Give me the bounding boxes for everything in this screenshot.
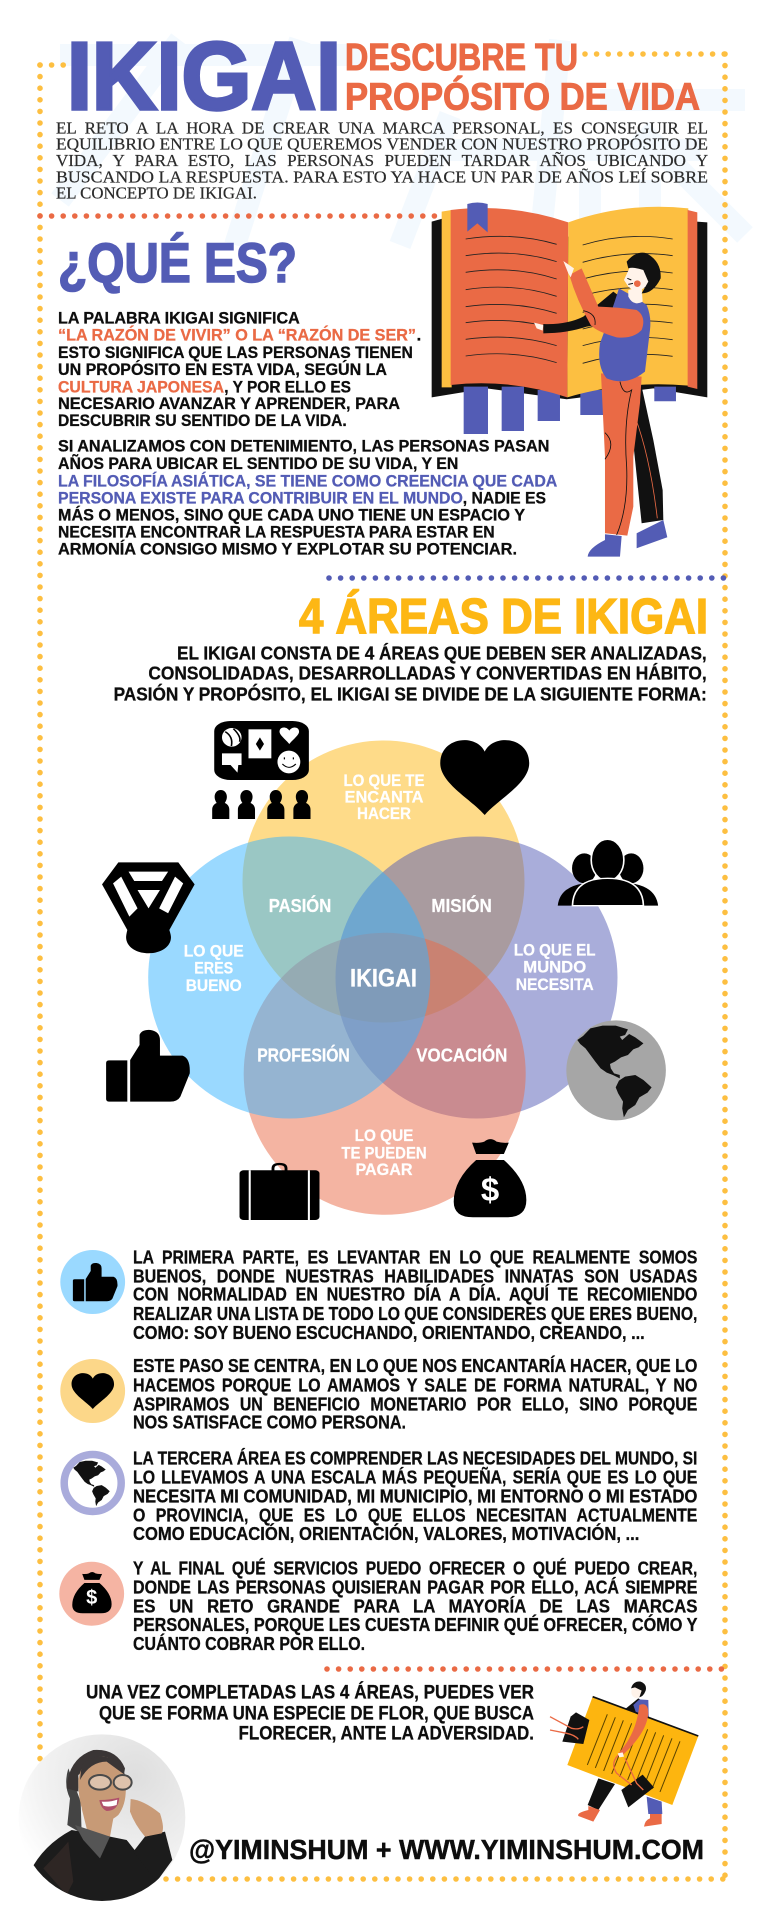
venn labels [184, 771, 596, 1179]
subtitle: descubre tu propósito de vida: DESCUBRE TU [345, 37, 578, 79]
background watermark [60, 40, 745, 245]
intro paragraph: EL CONCEPTO DE IKIGAI. [56, 184, 257, 203]
paragraph: areas intro: EL IKIGAI CONSTA DE 4 ÁREAS QUE DEBEN SER ANALIZADAS, [177, 642, 707, 663]
venn labels: LO QUE TE [344, 771, 424, 790]
paragraph: meaning of ikigai: . [416, 326, 421, 345]
list item 4: money: ES UN RETO GRANDE PARA LA MAYORÍA DE LAS MARCAS [133, 1596, 697, 1617]
paragraph: meaning of ikigai: NECESARIO AVANZAR Y APRENDER, PARA [58, 394, 400, 413]
list item 4: money: CUÁNTO COBRAR POR ELLO. [133, 1633, 365, 1654]
paragraph: meaning of ikigai: LA PALABRA IKIGAI SIGNIFICA [58, 308, 300, 327]
badge: money bag: $ [86, 1587, 97, 1609]
list item 2: love [60, 1355, 697, 1433]
list item 1: good at [60, 1246, 697, 1343]
paragraph: areas intro: CONSOLIDADAS, DESARROLLADAS Y CONVERTIDAS EN HÁBITO, [148, 662, 707, 683]
intro paragraph [56, 118, 708, 203]
paragraph: meaning of ikigai: ESTO SIGNIFICA QUE LAS PERSONAS TIENEN [58, 343, 413, 362]
subtitle: descubre tu propósito de vida: PROPÓSITO DE VIDA [345, 74, 700, 118]
venn labels: LO QUE [184, 942, 244, 961]
list item 2: love: ESTE PASO SE CENTRA, EN LO QUE NOS ENCANTARÍA HACER, QUE LO [133, 1355, 697, 1376]
icon: group of people [558, 839, 658, 906]
closing text: UNA VEZ COMPLETADAS LAS 4 ÁREAS, PUEDES VER [86, 1681, 534, 1704]
list item 4: money: DONDE LAS PERSONAS QUISIERAN PAGAR POR ELLO, ACÁ SIEMPRE [133, 1577, 697, 1598]
icon: briefcase [240, 1164, 319, 1220]
paragraph: areas intro: PASIÓN Y PROPÓSITO, EL IKIGAI SE DIVIDE DE LA SIGUIENTE FORMA: [114, 684, 707, 705]
heading: ¿qué es?: ¿QUÉ ES? [58, 231, 297, 294]
list item 1: good at: BUENOS, DONDE NUESTRAS HABILIDADES INNATAS SON USADAS [133, 1265, 697, 1286]
closing text [86, 1681, 534, 1744]
paragraph: asian philosophy: PERSONA EXISTE PARA CONTRIBUIR EN EL MUNDO [58, 489, 463, 508]
venn labels: LO QUE [355, 1126, 413, 1145]
illustration: person with open book [432, 202, 707, 557]
list item 4: money: PERSONALES, PORQUE LES CUESTA DEFINIR QUÉ OFRECER, CÓMO Y [133, 1614, 698, 1635]
icon: medal [102, 862, 195, 953]
venn diagram [148, 740, 618, 1215]
venn labels: PASIÓN [269, 895, 331, 916]
paragraph: asian philosophy: AÑOS PARA UBICAR EL SENTIDO DE SU VIDA, Y EN [58, 453, 458, 473]
icon: hobbies board and people [212, 721, 311, 819]
list item 3: world [64, 1447, 697, 1544]
intro paragraph: EL RETO A LA HORA DE CREAR UNA MARCA PERSONAL, ES CONSEGUIR EL [56, 118, 708, 137]
photo: author portrait [19, 1734, 185, 1905]
paragraph: meaning of ikigai [58, 308, 421, 430]
intro paragraph: VIDA, Y PARA ESTO, LAS PERSONAS PUEDEN TARDAR AÑOS UBICANDO Y [56, 151, 708, 170]
badge: thumbs up [60, 1250, 125, 1314]
list item 3: world: NECESITA MI COMUNIDAD, MI MUNICIPIO, MI ENTORNO O MI ESTADO [133, 1486, 697, 1507]
intro paragraph: EQUILIBRIO ENTRE LO QUE QUEREMOS VENDER CON NUESTRO PROPÓSITO DE [56, 135, 708, 154]
badge: heart [60, 1359, 125, 1423]
paragraph: meaning of ikigai: UN PROPÓSITO EN ESTA VIDA, SEGÚN LA [58, 360, 387, 379]
venn labels: TE PUEDEN [341, 1143, 427, 1162]
intro paragraph: BUSCANDO LA RESPUESTA. PARA ESTO YA HACE UN PAR DE AÑOS LEÍ SOBRE [56, 167, 708, 186]
venn labels: ENCANTA [344, 787, 424, 806]
list item 2: love: NOS SATISFACE COMO PERSONA. [133, 1412, 406, 1433]
icon: thumbs up [106, 1030, 190, 1102]
venn labels: MISIÓN [431, 895, 492, 916]
subtitle: descubre tu propósito de vida [345, 37, 700, 118]
paragraph: asian philosophy: NECESITA ENCONTRAR LA RESPUESTA PARA ESTAR EN [58, 522, 495, 541]
venn labels: MUNDO [523, 957, 586, 976]
title: IKIGAI: IKIGAI [67, 23, 341, 130]
venn labels: ERES [194, 958, 233, 977]
venn labels: IKIGAI [350, 965, 417, 993]
list item 1: good at: CON NORMALIDAD EN NUESTRO DÍA A DÍA. AQUÍ TE RECOMIENDO [133, 1284, 697, 1305]
closing text: QUE SE FORMA UNA ESPECIE DE FLOR, QUE BUSCA [99, 1702, 534, 1724]
paragraph: asian philosophy [58, 437, 557, 558]
person [534, 253, 667, 557]
paragraph: asian philosophy: SI ANALIZAMOS CON DETENIMIENTO, LAS PERSONAS PASAN [58, 437, 550, 456]
paragraph: meaning of ikigai: , Y POR ELLO ES [224, 377, 351, 396]
paragraph: areas intro [114, 642, 707, 705]
heading: 4 áreas de ikigai: 4 ÁREAS DE IKIGAI [299, 590, 708, 644]
badge: globe [64, 1454, 121, 1512]
list item 2: love: HACEMOS PORQUE LO AMAMOS Y SALE DE FORMA NATURAL, Y NO [133, 1374, 697, 1395]
paragraph: asian philosophy: ARMONÍA CONSIGO MISMO Y EXPLOTAR SU POTENCIAR. [58, 539, 517, 558]
venn labels: VOCACIÓN [416, 1045, 507, 1066]
paragraph: meaning of ikigai: CULTURA JAPONESA [58, 377, 224, 396]
venn labels: HACER [357, 804, 411, 823]
icon: heart [440, 740, 529, 815]
venn labels: PROFESIÓN [257, 1045, 350, 1066]
illustration: person carrying document [550, 1682, 698, 1827]
list item 3: world: COMO EDUCACIÓN, ORIENTACIÓN, VALORES, MOTIVACIÓN, ... [133, 1523, 639, 1544]
badge: money bag [59, 1562, 124, 1626]
venn labels: BUENO [186, 976, 242, 995]
paragraph: asian philosophy: MÁS O MENOS, SINO QUE CADA UNO TIENE UN ESPACIO Y [58, 506, 526, 525]
list item 1: good at: COMO: SOY BUENO ESCUCHANDO, ORIENTANDO, CREANDO, ... [133, 1322, 645, 1343]
icon: money bag [454, 1139, 526, 1217]
list item 4: money [59, 1557, 698, 1654]
paragraph: meaning of ikigai: “LA RAZÓN DE VIVIR” O LA “RAZÓN DE SER” [58, 326, 416, 345]
paragraph: asian philosophy: , NADIE ES [463, 489, 546, 508]
paragraph: asian philosophy: LA FILOSOFÍA ASIÁTICA, SE TIENE COMO CREENCIA QUE CADA [58, 471, 557, 490]
venn labels: LO QUE EL [514, 941, 596, 960]
venn labels: NECESITA [516, 975, 594, 994]
footer: handle and website: @YIMINSHUM + WWW.YIMINSHUM.COM [189, 1834, 704, 1865]
venn labels: PAGAR [356, 1160, 412, 1179]
icon: globe [566, 1020, 666, 1120]
closing text: FLORECER, ANTE LA ADVERSIDAD. [238, 1722, 534, 1744]
paragraph: meaning of ikigai: DESCUBRIR SU SENTIDO DE LA VIDA. [58, 411, 347, 430]
icon: money bag: $ [481, 1171, 499, 1208]
